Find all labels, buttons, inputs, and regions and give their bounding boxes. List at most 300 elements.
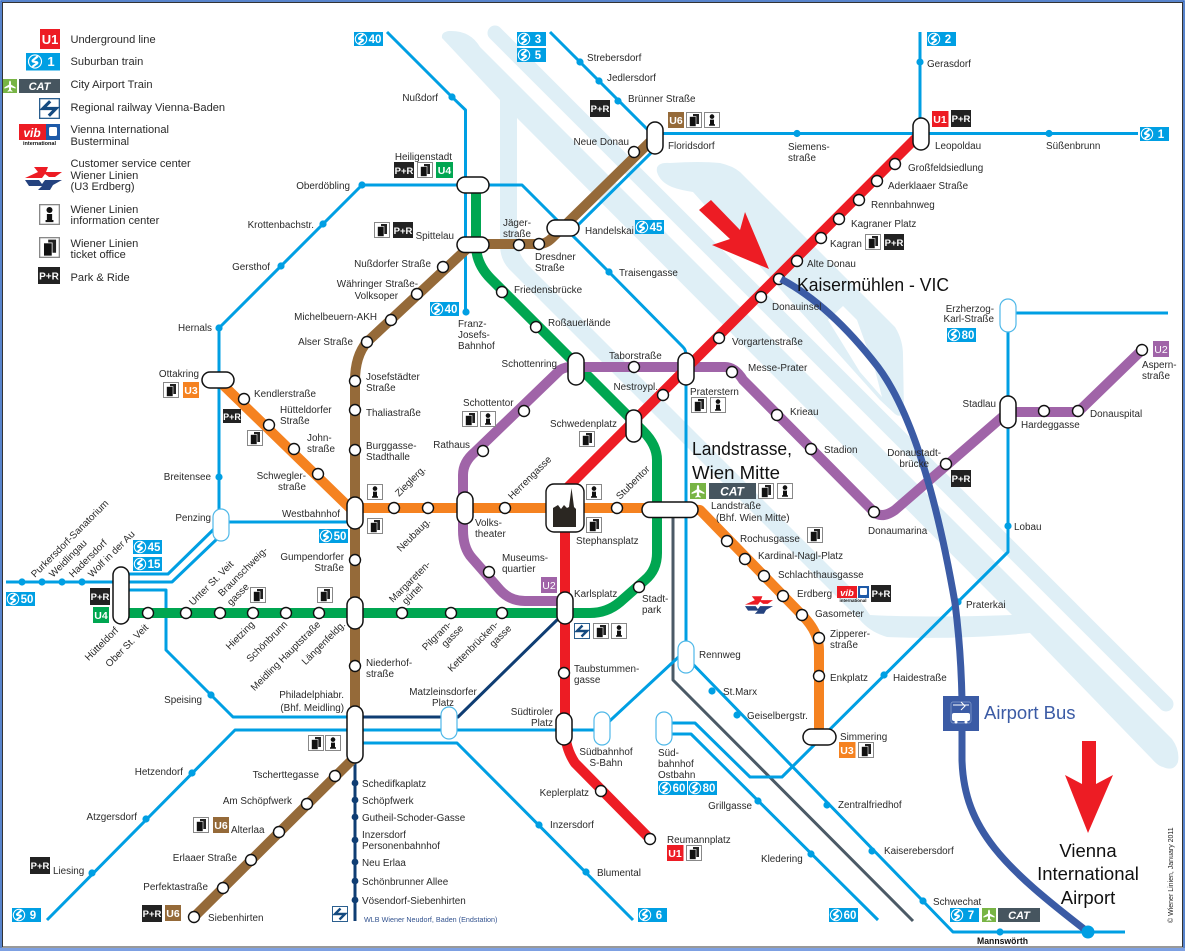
station labels: rotated west: Pilgram- [420, 619, 454, 653]
legend: ticket office: Wiener Linien [70, 238, 138, 250]
badge S3 [517, 32, 546, 46]
legend: bus terminal [19, 124, 169, 148]
station labels: south: Schöpfwerk [362, 796, 414, 807]
station labels: north-west: Straße [314, 563, 345, 574]
Reumannplatz icons [667, 845, 702, 861]
station labels: east: Kaiserebersdorf [884, 846, 954, 857]
station labels: rotated west: Margareten- [387, 559, 433, 605]
station labels: city centre: Messe-Prater [748, 363, 808, 374]
badge S45 Handelskai: 45 [650, 222, 663, 234]
station labels: north-west: Schwegler- [257, 471, 306, 482]
Wiener Linien logo Erdberg [745, 596, 773, 614]
Rochusgasse ticket [808, 528, 822, 542]
P+R U3 [223, 409, 241, 423]
station labels: north-west: Spittelau [416, 231, 454, 242]
station labels: east: Donauspital [1090, 409, 1142, 420]
station labels: north-west: Oberdöbling [296, 181, 350, 192]
station labels: city centre [433, 351, 870, 684]
Siebenhirten icons [142, 905, 181, 922]
water: Danube and canal [442, 31, 1178, 769]
Spittelau icons: P+R [394, 226, 413, 237]
station labels: north-west: Volksoper [355, 291, 399, 302]
U3 orange line [218, 380, 819, 737]
station labels: south: Tscherttegasse [253, 770, 319, 781]
legend: customer service [25, 158, 191, 193]
callout: Landstrasse: Landstrasse, [692, 438, 792, 459]
station labels: south: Inzersdorf [362, 830, 406, 841]
station labels: north-west: Heiligenstadt [395, 152, 452, 163]
Ottakring icons: U3 [184, 385, 198, 397]
station labels: south: Gutheil-Schoder-Gasse [362, 813, 466, 824]
badge S1: 1 [1158, 129, 1165, 141]
arrow: to airport [1065, 741, 1113, 833]
Schwechat CAT icons: CAT [1008, 910, 1031, 922]
station labels: south: Niederhof- [366, 658, 412, 669]
station labels: rotated west: Hadersdorf [67, 538, 110, 580]
station labels: north-centre: Erzherzog- [946, 304, 994, 315]
station labels: south: Platz [531, 718, 553, 729]
station labels: rotated west: Stubentor [614, 464, 653, 502]
station labels: east: Lobau [1014, 522, 1041, 533]
station labels: city centre: Taborstraße [609, 351, 662, 362]
station labels: east: Zentralfriedhof [838, 800, 902, 811]
badge S50 Westbahnhof [319, 529, 348, 543]
badge S60 Ostbahn: 60 [673, 783, 685, 795]
station labels: city centre: Erdberg [797, 589, 832, 600]
callout: Landstrasse: Wien Mitte [692, 462, 780, 483]
station labels: north-centre: Kagran [830, 239, 862, 250]
station labels: north-west: Westbahnhof [282, 509, 340, 520]
station labels: north-centre: Großfeldsiedlung [908, 163, 983, 174]
station labels: north-centre: Donauinsel [772, 302, 821, 313]
station labels: north-centre: Leopoldau [935, 141, 981, 152]
station labels: north-centre: Rennbahnweg [871, 200, 935, 211]
station labels: south: (Bhf. Meidling) [280, 703, 344, 714]
badge S5: 5 [535, 50, 542, 62]
Stephansplatz ticket [586, 518, 602, 532]
Heiligenstadt icons: P+R [395, 166, 414, 177]
legend: bus terminal: vib [23, 126, 41, 140]
P+R Brünner Straße: P+R [591, 104, 610, 115]
station labels: rotated west: Unter St. Veit [187, 559, 236, 608]
station labels: east: Geiselbergstr. [747, 711, 808, 722]
Reumannplatz icons: U1 [668, 848, 682, 860]
Hütteldorf icons: P+R [91, 592, 110, 603]
station labels: north-centre: Jäger- [503, 218, 531, 229]
Hütteldorf icons [90, 588, 110, 623]
station labels: north-centre: Roßauerlände [548, 318, 611, 329]
station labels: north-centre: Handelskai [585, 226, 634, 237]
station labels: east: Stadlau [962, 399, 996, 410]
station labels: rotated west: Neubaug. [395, 516, 433, 554]
badge S3: 3 [535, 34, 541, 46]
station labels: south: Hetzendorf [135, 767, 183, 778]
station labels: south: Süd- [658, 748, 679, 759]
station labels: east: Grillgasse [708, 801, 753, 812]
grey line: City Airport Train [673, 515, 913, 921]
station labels: south: Ostbahn [658, 770, 695, 781]
badge S1 [1140, 127, 1169, 141]
badge S45 Penzing [133, 540, 162, 554]
legend: park and ride [38, 267, 130, 284]
station labels: north-west [159, 93, 495, 574]
regional railway stations [352, 780, 358, 903]
station labels: city centre: Stephansplatz [576, 536, 639, 547]
P+R U3: P+R [223, 412, 241, 422]
station labels: north-centre [503, 53, 1100, 348]
station labels: south: Südbahnhof [579, 747, 633, 758]
station labels: rotated west: gasse [440, 623, 466, 650]
badge S60 south: 60 [844, 910, 856, 922]
legend: regional railway: Regional railway Vienna-Baden [70, 102, 225, 114]
WLB terminus note: WLB Wiener Neudorf, Baden (Endstation) [364, 915, 497, 924]
station labels: rotated west: gasse [488, 623, 514, 650]
station labels: rotated west [29, 454, 653, 693]
station labels: north-centre: Floridsdorf [668, 141, 715, 152]
station labels: rotated west: gürtel [400, 582, 426, 607]
Westbahnhof ticket [368, 518, 382, 534]
legend: customer service: Customer service center [70, 158, 191, 170]
station labels: city centre: Gasometer [815, 609, 865, 620]
station labels: north-west: straße [307, 444, 335, 455]
airport bus icon [943, 696, 979, 731]
station labels: east: Donaustadt- [887, 448, 941, 459]
station labels: east: Simmering [840, 732, 887, 743]
Schwedenplatz ticket [580, 432, 594, 446]
Erdberg icons: international [839, 598, 867, 603]
badge S50 west [6, 592, 35, 606]
legend: information center: information center [70, 215, 160, 227]
P+R Brünner Straße [590, 100, 610, 117]
station labels: north-west: Straße [280, 416, 310, 427]
station labels: south: Blumental [597, 868, 641, 879]
underground stations [142, 146, 1148, 922]
U2 tile Aspernstraße: U2 [1154, 344, 1168, 356]
badge S80 Erzherzog-Karl [947, 328, 976, 342]
legend: ticket office [40, 238, 138, 261]
badge S45 Handelskai [635, 220, 664, 234]
station labels: city centre: Stadt- [642, 594, 668, 605]
station labels: south [53, 658, 731, 924]
station labels: city centre: Praterstern [690, 387, 739, 398]
station labels: rotated west: Meidling Hauptstraße [249, 619, 323, 693]
station labels: east: Rennweg [699, 650, 741, 661]
Kagran icons: P+R [885, 238, 904, 249]
station labels: east: Hardeggasse [1021, 420, 1080, 431]
legend [3, 29, 225, 284]
WLB icon [332, 906, 348, 922]
callout: Vienna International Airport: Airport [1061, 887, 1115, 908]
station labels: east: Praterkai [966, 600, 1006, 611]
station labels: north-centre: Brünner Straße [628, 94, 696, 105]
callout: Vienna International Airport: Vienna [1059, 840, 1117, 861]
station labels: east: Aspern- [1142, 360, 1177, 371]
Stephansplatz info [586, 484, 602, 500]
Leopoldau icons [932, 110, 971, 127]
arrow: to Kaisermühlen [699, 200, 769, 269]
station labels: south: straße [366, 669, 394, 680]
station labels: north-west: Krottenbachstr. [248, 220, 314, 231]
badge S40 Franz-Josefs-Bahnhof [430, 302, 459, 316]
station labels: rotated west: Weidlingau [47, 538, 90, 580]
station labels: north-west: Bahnhof [458, 341, 495, 352]
Hütteldorf icons: U4 [94, 610, 108, 622]
station labels: city centre: Volks- [475, 518, 502, 529]
station labels: south: Schönbrunner Allee [362, 877, 449, 888]
badge S2: 2 [945, 34, 951, 46]
station labels: north-west: John- [307, 433, 332, 444]
station labels: rotated west: Hütteldorf [83, 625, 121, 663]
station labels: south: gasse [574, 675, 601, 686]
legend: bus terminal: Busterminal [70, 136, 129, 148]
station labels: north-centre: straße [788, 153, 816, 164]
Simmering icons: U3 [840, 745, 854, 757]
station labels: city centre: Enkplatz [830, 673, 868, 684]
station labels: north-west: Josefs- [458, 330, 490, 341]
station labels: east: Kledering [761, 854, 803, 865]
Simmering icons [839, 742, 874, 758]
station labels: north-west: Hernals [178, 323, 212, 334]
station labels: north-west: Nußdorf [402, 93, 438, 104]
station labels: east: straße [1142, 371, 1170, 382]
station labels: north-west: Burggasse- [366, 441, 416, 452]
station labels: south: Taubstummen- [574, 664, 639, 675]
station labels: rotated west: Purkersdorf-Sanatorium [29, 498, 111, 580]
station labels: north-centre: Aderklaaer Straße [888, 181, 969, 192]
badge S80 Ostbahn: 80 [703, 783, 715, 795]
badge S50 west: 50 [21, 594, 33, 606]
legend: suburban train: Suburban train [70, 56, 143, 68]
legend: bus terminal: international [23, 141, 56, 147]
station labels: north-west: Stadthalle [366, 452, 410, 463]
legend: city airport train: City Airport Train [70, 79, 152, 91]
Spittelau icons [374, 222, 413, 238]
station labels: south: Erlaaer Straße [173, 853, 238, 864]
legend: suburban train [26, 53, 143, 70]
station labels: east: Donaumarina [868, 526, 928, 537]
badge S6: 6 [656, 910, 662, 922]
station labels: north-centre: Gerasdorf [927, 59, 971, 70]
station labels: east: Haidestraße [893, 673, 947, 684]
station labels: east: St.Marx [723, 687, 757, 698]
badge S80 Erzherzog-Karl: 80 [962, 330, 974, 342]
Karlsplatz icons [574, 624, 626, 638]
station labels: rotated west: Kettenbrücken- [446, 619, 501, 674]
ticket Meidling [318, 588, 332, 602]
station labels: south: Platz [432, 698, 454, 709]
badge S9: 9 [30, 910, 36, 922]
interchange stations [113, 118, 1016, 763]
badge S7: 7 [968, 910, 974, 922]
station labels: north-centre: Kagraner Platz [851, 219, 916, 230]
station labels: rotated west: Hietzing [224, 619, 257, 652]
badge S7 [950, 908, 979, 922]
station labels: south: Am Schöpfwerk [223, 796, 292, 807]
station labels: rotated west: Zieglerg. [393, 464, 428, 499]
callout: Kaisermühlen: Kaisermühlen - VIC [797, 274, 949, 295]
badge S5 [517, 48, 546, 62]
station labels: city centre: Rochusgasse [740, 534, 800, 545]
Stephansplatz cathedral [546, 484, 584, 532]
P+R Liesing [30, 857, 50, 874]
ticket Hietzing [250, 588, 266, 602]
station labels: city centre: quartier [502, 564, 536, 575]
U2 purple line [463, 350, 1142, 601]
Alterlaa icons: U6 [214, 820, 228, 832]
badge S40 Franz-Josefs-Bahnhof: 40 [445, 304, 457, 316]
P+R Donaustadtbrücke [951, 470, 971, 487]
station labels: north-west: Gersthof [232, 262, 270, 273]
station labels: north-west: Währinger Straße- [337, 279, 418, 290]
station labels: south: Speising [164, 695, 202, 706]
station labels: north-centre: Süßenbrunn [1046, 141, 1100, 152]
Landstraße icons: CAT [720, 484, 746, 498]
station labels: east: brücke [899, 459, 930, 470]
station labels: rotated west: Wolf in der Au [86, 529, 137, 580]
badge S2 [927, 32, 956, 46]
Leopoldau icons: P+R [952, 114, 971, 125]
U2 tile Karlsplatz: U2 [542, 580, 556, 592]
Ottakring icons [164, 382, 199, 398]
Mannswörth label: Mannswörth [977, 936, 1028, 947]
Landstraße icons [690, 483, 792, 499]
station labels: north-centre: Friedensbrücke [514, 285, 583, 296]
callout: Airport Bus: Airport Bus [984, 702, 1076, 723]
station labels: north-west: Penzing [175, 513, 211, 524]
station labels: north-centre: Alte Donau [807, 259, 856, 270]
station labels: city centre: Museums- [502, 553, 548, 564]
legend: regional railway [40, 99, 225, 118]
station labels: city centre: Landstraße [711, 501, 761, 512]
station labels: city centre: Zipperer- [830, 629, 870, 640]
badge S80 Ostbahn [688, 781, 717, 795]
station labels: south: bahnhof [658, 759, 694, 770]
station labels: south: Vösendorf-Siebenhirten [362, 896, 466, 907]
P+R Liesing: P+R [31, 861, 50, 872]
station labels: south: Atzgersdorf [86, 812, 137, 823]
U2 tile Aspernstraße [1153, 341, 1169, 357]
station labels: rotated west: Ober St. Veit [104, 622, 151, 670]
copyright: © Wiener Linien, January 2011 [1167, 827, 1175, 923]
Kagran icons [866, 234, 904, 250]
legend: customer service: Wiener Linien [70, 170, 138, 182]
station labels: city centre: park [642, 605, 661, 616]
legend: customer service: (U3 Erdberg) [70, 181, 135, 193]
badge S45 Penzing: 45 [148, 542, 161, 554]
station labels: city centre: Schottentor [463, 398, 514, 409]
station labels: city centre: Kardinal-Nagl-Platz [758, 551, 843, 562]
badge S15 [133, 557, 162, 571]
station labels: rotated west: Längenfeldg. [300, 619, 348, 668]
station labels: south: S-Bahn [590, 758, 622, 769]
badge S60 south [829, 908, 858, 922]
U2 tile Karlsplatz [541, 577, 557, 593]
Heiligenstadt icons [394, 162, 453, 178]
station labels: north-west: Ottakring [159, 369, 199, 380]
station labels: north-west: Josefstädter [366, 372, 421, 383]
station labels: north-centre: Jedlersdorf [607, 73, 656, 84]
Alterlaa icons [194, 817, 229, 833]
callout: Vienna International Airport [1037, 840, 1139, 908]
badge S9 [12, 908, 41, 922]
station labels: south: Liesing [53, 866, 84, 877]
station labels: north-centre: Neue Donau [574, 137, 629, 148]
legend: park and ride: P+R [39, 272, 60, 282]
Praterstern icons [692, 398, 726, 412]
station labels: city centre: (Bhf. Wien Mitte) [716, 513, 790, 524]
legend: underground: U1 [42, 32, 58, 47]
station labels: north-centre: Dresdner [535, 252, 576, 263]
station labels: city centre: straße [830, 640, 858, 651]
station labels: north-west: Hütteldorfer [280, 405, 332, 416]
station labels: rotated west: Braunschweig- [216, 545, 270, 599]
Erdberg icons: vib [840, 588, 854, 599]
legend: information center [40, 204, 160, 227]
station labels: north-west: Breitensee [164, 472, 211, 483]
U6 brown line [194, 137, 655, 917]
station labels: city centre: Karlsplatz [574, 589, 617, 600]
badge S6 [638, 908, 667, 922]
legend: underground: Underground line [70, 34, 156, 46]
station labels: north-west: Straße [366, 383, 396, 394]
legend: underground [40, 29, 156, 49]
Philadelphiabrücke icons [308, 736, 340, 750]
station labels: south: Philadelphiabr. [279, 690, 344, 701]
badge S40 [354, 32, 383, 46]
station labels: north-west: Alser Straße [298, 337, 353, 348]
station labels: rotated west: gasse [225, 581, 252, 608]
legend: city airport train [3, 79, 152, 93]
Siebenhirten icons: U6 [166, 908, 180, 920]
Leopoldau icons: U1 [933, 114, 947, 126]
station labels: south: Matzleinsdorfer [409, 687, 477, 698]
P+R Donaustadtbrücke: P+R [952, 474, 971, 485]
station labels: north-centre: Karl-Straße [944, 314, 995, 325]
station labels: south: Personenbahnhof [362, 841, 440, 852]
station labels: rotated west: Schönbrunn [245, 619, 290, 665]
station labels: south: Alterlaa [231, 825, 265, 836]
suburban-only interchanges [213, 299, 1016, 745]
badge S60 Ostbahn [658, 781, 687, 795]
legend: bus terminal: Vienna International [70, 124, 169, 136]
Heiligenstadt icons: U4 [438, 165, 451, 177]
station labels: north-centre: Siemens- [788, 142, 830, 153]
station labels: city centre: Schwedenplatz [550, 419, 617, 430]
station labels: south: Reumannplatz [667, 835, 731, 846]
station labels: south: Schedifkaplatz [362, 779, 426, 790]
station labels: south: Inzersdorf [550, 820, 594, 831]
station labels: north-west: Gumpendorfer [280, 552, 345, 563]
legend: information center: Wiener Linien [70, 204, 138, 216]
station labels: south: Neu Erlaa [362, 858, 406, 869]
Erdberg icons [837, 585, 891, 603]
legend: suburban train: 1 [47, 54, 55, 69]
station labels: north-west: Michelbeuern-AKH [294, 312, 377, 323]
station labels: city centre: Krieau [790, 407, 819, 418]
callout: Vienna International Airport: International [1037, 863, 1139, 884]
station labels: north-centre: Vorgartenstraße [732, 337, 803, 348]
station labels: north-west: Thaliastraße [366, 408, 421, 419]
badge S50 Westbahnhof: 50 [334, 531, 346, 543]
station labels: south: Südtiroler [511, 707, 554, 718]
legend: park and ride: Park & Ride [70, 272, 130, 284]
station labels: city centre: Nestroypl. [614, 382, 658, 393]
station labels: city centre: Rathaus [433, 440, 470, 451]
station labels: north-centre: Straße [535, 263, 565, 274]
airport dot [1082, 926, 1094, 938]
station labels: north-west: straße [278, 482, 306, 493]
station labels: city centre: Stadion [824, 445, 858, 456]
